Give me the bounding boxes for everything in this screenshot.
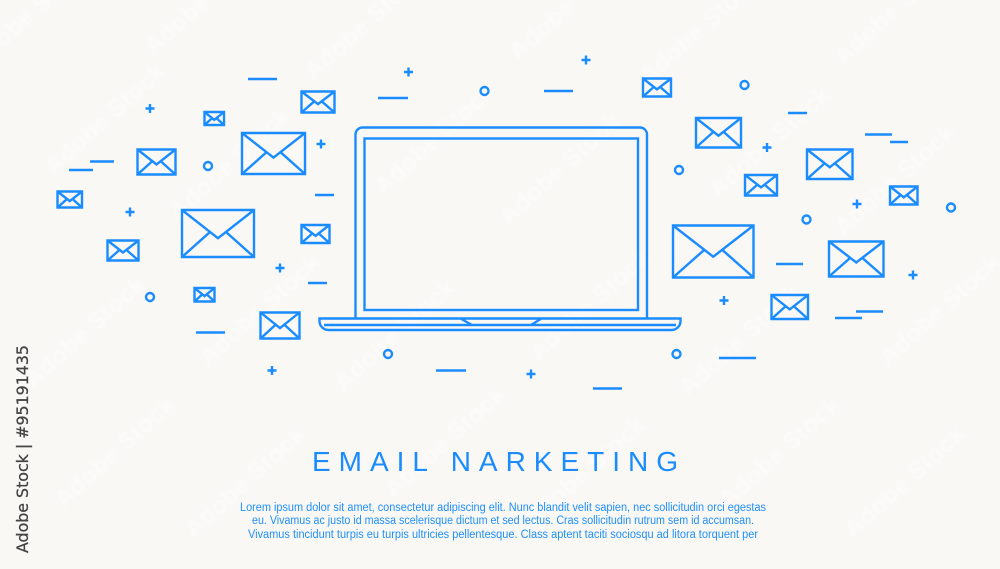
- watermark pattern: Adobe Stock: [39, 57, 171, 181]
- icon: envelope: [673, 226, 754, 278]
- watermark pattern: Adobe Stock: [519, 410, 651, 534]
- body text: Vivamus tincidunt turpis eu turpis ultricies pellentesque. Class aptent taciti sociosqu ad litora torquent per: [248, 529, 758, 541]
- envelopes: left group: [58, 92, 334, 338]
- icon: envelope: [242, 133, 305, 174]
- stock id label: Adobe Stock | #95191435: [13, 345, 32, 553]
- decorative dashes: [69, 79, 908, 388]
- icon: envelope: [194, 288, 214, 302]
- watermark pattern: Adobe Stock: [704, 80, 836, 204]
- watermark pattern: Adobe Stock: [49, 390, 181, 514]
- watermark pattern: Adobe Stock: [194, 248, 326, 372]
- laptop base: [320, 318, 680, 330]
- watermark pattern: Adobe Stock: [494, 107, 626, 231]
- decorative plus signs: [126, 56, 918, 378]
- watermark pattern: Adobe Stock: [829, 118, 961, 242]
- watermark pattern: Adobe Stock: [19, 270, 151, 394]
- icon: envelope: [204, 112, 224, 125]
- body text: Lorem ipsum dolor sit amet, consectetur adipiscing elit. Nunc blandit velit sapien, nec sollicitudin orci egestas: [240, 502, 766, 514]
- icon: envelope: [108, 240, 138, 260]
- icon: envelope: [302, 225, 330, 243]
- laptop screen: [364, 138, 638, 310]
- icon: envelope: [696, 118, 741, 148]
- icon: envelope: [138, 150, 176, 174]
- icon: envelope: [745, 175, 777, 196]
- body text: [240, 502, 766, 541]
- watermark pattern: Adobe Stock: [379, 380, 511, 504]
- watermark pattern: Adobe Stock: [329, 273, 461, 397]
- icon: laptop: [320, 128, 680, 330]
- decorative circles: [146, 81, 955, 358]
- icon: envelope: [643, 78, 671, 96]
- watermark pattern: Adobe Stock: [714, 390, 846, 514]
- icon: envelope: [890, 186, 918, 204]
- watermark pattern: Adobe Stock: [369, 77, 501, 201]
- watermark pattern: Adobe Stock: [674, 278, 806, 402]
- watermark pattern: Adobe Stock: [524, 243, 656, 367]
- watermark pattern: Adobe Stock: [164, 102, 296, 226]
- icon: envelope: [807, 150, 852, 179]
- icon: envelope: [302, 92, 334, 112]
- watermark pattern: Adobe Stock: [179, 420, 311, 544]
- icon: envelope: [260, 312, 300, 338]
- title: EMAIL NARKETING: [312, 446, 678, 477]
- laptop lid: [356, 128, 647, 318]
- icon: envelope: [772, 295, 808, 319]
- envelopes: right group: [643, 78, 918, 319]
- icon: envelope: [829, 242, 884, 276]
- body text: eu. Vivamus ac justo id massa scelerisque dictum et sed lectus. Cras sollicitudin rutrum sem id accumsan.: [252, 515, 754, 527]
- icon: envelope: [182, 210, 254, 257]
- watermark pattern: Adobe Stock: [839, 420, 971, 544]
- icon: envelope: [58, 192, 82, 208]
